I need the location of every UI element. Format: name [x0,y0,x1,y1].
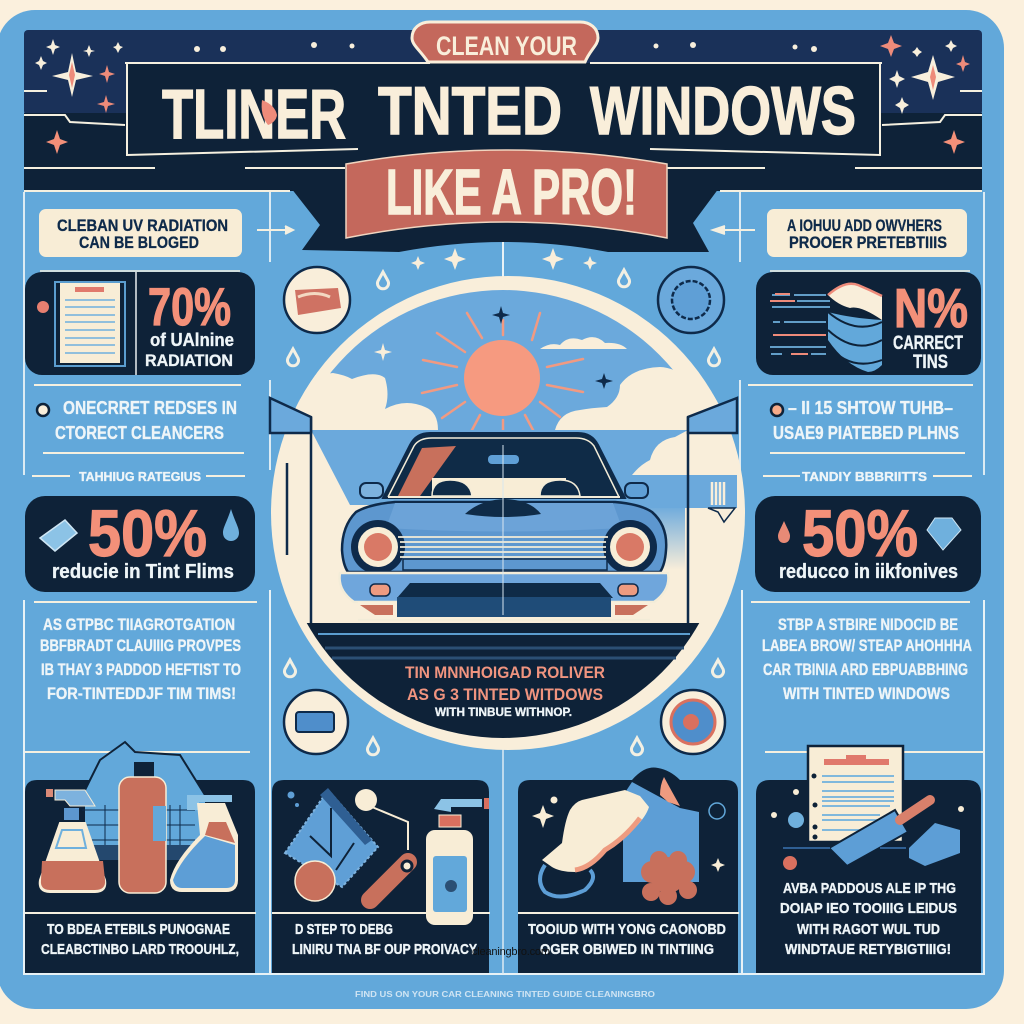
bottom panel 3: hand and cloth: TOOIUD WITH YONG CAONOBD [528,921,726,938]
stat card: 70% [25,271,255,375]
callout: right: PROOER PRETEBTIIIS [789,233,947,252]
icon badge: film strip [284,267,350,333]
car body [342,502,666,572]
cloth [612,782,699,882]
microfiber cloth [285,790,378,887]
watermark: cleaningbro.com [472,946,550,958]
main title: TNTED [378,73,562,149]
icon: diamond [927,518,961,550]
sparkle stars [532,805,554,828]
stat card: N% [756,271,981,375]
callout: left: CLEBAN UV RADIATION [57,216,228,235]
header band [24,30,982,191]
bottom panel 4: guide and brush: WINDTAUE RETYBIGTIIIG! [785,941,951,958]
stat card: 70%: 70% [148,278,231,337]
right paragraph: STBP A STBIRE NIDOCID BE [778,615,958,634]
badge: clean your: CLEAN YOUR [436,31,577,61]
bottom panel 1: products [25,742,256,973]
stat card: N%: TINS [913,352,948,373]
small sky stars [374,343,644,456]
bottom panel 4: guide and brush: DOIAP IEO TOOIIIG LEIDUS [780,900,957,917]
icon badge: kit [284,690,348,754]
stat card: 70%: RADIATION [145,351,233,370]
white bars [712,482,724,505]
stat card: N%: N% [894,277,968,339]
grille [398,537,608,557]
stat card: 50% left: 50% [88,496,207,570]
left paragraph [34,602,257,703]
spray bottle [40,789,105,892]
bottom panel 4: guide and brush [756,746,984,973]
stat card: N%: CARRECT [893,333,963,354]
car illustration [340,433,668,620]
lower valance [358,602,650,620]
bottom panel 3: hand and cloth [518,768,739,973]
water drops [284,270,724,755]
tall bottle [119,762,166,893]
left paragraph: IB THAY 3 PADDOD HEFTIST TO [41,660,241,679]
icon badge: ring [658,267,724,333]
callout: left [39,209,242,257]
scrub brush [909,823,960,866]
road panel [306,623,700,738]
icon: tint film layers [770,284,882,372]
bottle [434,799,482,812]
right tip: – II 15 SHTOW TUHB– [788,398,953,418]
stat card: 70%: of UAlnine [150,330,234,350]
bottom panel 1: products: TO BDEA ETEBILS PUNOGNAE [47,921,230,938]
hood scoop [465,499,541,517]
stat card: 50% right [755,496,981,592]
callout: right [767,209,967,257]
sky [330,290,673,430]
badge: clean your [412,22,598,62]
stat card: 50% right: 50% [802,496,918,570]
left tip [32,385,245,484]
icon: document [55,282,125,366]
sparkle stars, right [654,35,970,154]
main title: WINDOWS [590,73,856,149]
clouds [270,337,740,430]
document [808,746,903,842]
left tip: ONECRRET REDSES IN [63,398,237,418]
icon: water drop [223,509,239,541]
right tip [748,385,973,484]
bottom panel 1: products: CLEABCTINBO LARD TROOUHLZ, [41,941,239,958]
bumper [340,573,668,602]
headlights [351,520,657,574]
road panel: AS G 3 TINTED WITDOWS [407,685,603,704]
frame lines [24,192,984,974]
arrows and stars beneath ribbon [257,226,755,270]
sparkle stars, left [35,39,354,154]
icon: salmon drop [778,521,790,543]
ribbon: like a pro: LIKE A PRO! [386,156,637,228]
central title banner [126,63,881,155]
road panel: WITH TINBUE WITHNOP. [435,705,572,719]
windshield glass [398,446,456,496]
windshield frame [383,433,625,498]
left tip: TAHHIUG RATEGIUS [79,469,201,484]
right paragraph [751,602,972,703]
main title: TLINER [162,75,346,153]
footer fine print: FIND US ON YOUR CAR CLEANING TINTED GUIDE CLEANINGBRO [355,990,655,999]
right tip: USAE9 PIATEBED PLHNS [773,423,959,443]
lower blue backdrop [311,430,688,505]
bottom panel 2: cloth and bottle: LINIRU TNA BF OUP PROIVACY [292,941,477,958]
hand [542,790,649,872]
callout: left: CAN BE BLOGED [79,233,199,252]
sun [422,313,583,430]
main title [162,73,856,153]
trigger bottle [170,795,238,892]
right paragraph: WITH TINTED WINDOWS [783,684,950,703]
bottom panel 2: cloth and bottle [272,780,490,973]
roller tool [355,789,377,811]
right tip: TANDIY BBBRIITTS [802,469,927,484]
icon: glass shard [40,520,77,551]
bottom panel 4: guide and brush: AVBA PADDOUS ALE IP THG [783,880,956,897]
bottom panel 2: cloth and bottle: D STEP TO DEBG [295,921,393,938]
backdrop building [85,742,205,860]
ribbon: like a pro [346,150,667,238]
icon badge: pie [661,690,725,754]
central hero circle [270,276,745,750]
road panel: TIN MNNHOIGAD ROLIVER [405,663,605,682]
paint brush [829,810,908,866]
left paragraph: FOR-TINTEDDJF TIM TIMS! [47,684,236,703]
ribbon tails [291,185,719,252]
bottom panel 4: guide and brush: WITH RAGOT WUL TUD [797,921,940,938]
callout: right: A IOHUU ADD OWVHERS [787,216,942,235]
bottom panel 3: hand and cloth: OGER OBIWED IN TINTIING [540,941,714,958]
sponge [641,851,697,905]
dots [793,789,799,795]
left paragraph: BBFBRADT CLAUIIIG PROVPES [40,636,241,655]
stat card: 50% right: reducco in iikfonives [779,561,958,583]
side mirrors [360,483,383,498]
left tip: CTORECT CLEANCERS [55,423,224,443]
stat card: 50% left: reducie in Tint Flims [52,561,234,583]
left paragraph: AS GTPBC TIIAGROTGATION [43,615,235,634]
flag poles [270,398,737,623]
stat card: 50% left [25,496,255,592]
